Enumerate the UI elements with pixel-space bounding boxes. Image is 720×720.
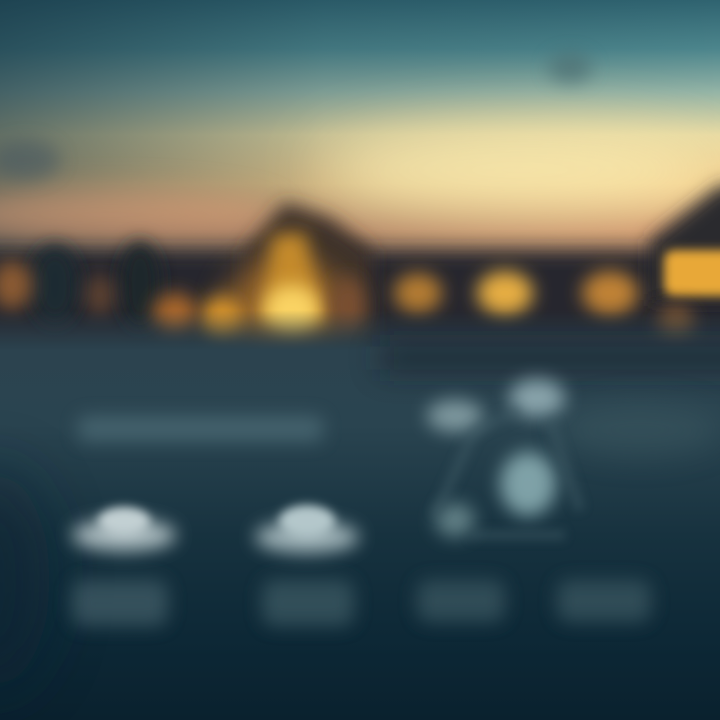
dark foreground ground <box>0 310 720 720</box>
building silhouette <box>0 185 720 352</box>
faint heading bar <box>78 416 323 442</box>
sky background <box>0 0 720 270</box>
left cloud icon <box>72 507 176 551</box>
middle cloud icon <box>255 505 359 553</box>
network diagram icon <box>427 379 580 537</box>
caption blocks <box>72 580 651 626</box>
glowing windows <box>0 232 720 351</box>
distant birds in the sky <box>0 53 592 180</box>
